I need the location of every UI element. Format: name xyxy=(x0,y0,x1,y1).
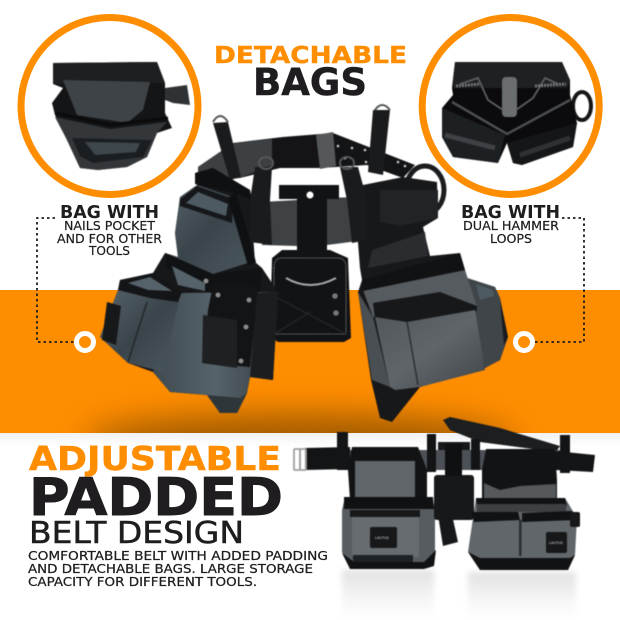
label: left bag: NAILS POCKET xyxy=(64,219,156,233)
title: detachable: DETACHABLE xyxy=(214,41,407,69)
d rings xyxy=(213,105,390,169)
circle: right bag detail xyxy=(422,18,599,194)
center hanger xyxy=(262,185,366,254)
label: right bag: DUAL HAMMER xyxy=(463,219,559,233)
belt xyxy=(294,447,595,472)
left bag xyxy=(342,447,436,569)
center pouch xyxy=(434,442,474,546)
description xyxy=(28,548,328,589)
description: AND DETACHABLE BAGS. LARGE STORAGE xyxy=(28,561,313,576)
hammer loop xyxy=(406,166,444,214)
product photo: front view xyxy=(294,417,595,620)
heading: belt design: BELT DESIGN xyxy=(29,516,244,551)
circle: left bag detail xyxy=(21,18,198,194)
belt straps xyxy=(213,110,390,245)
label: left bag: AND FOR OTHER xyxy=(57,232,162,246)
title: bags: BAGS xyxy=(253,61,367,104)
upper pouch xyxy=(165,185,248,274)
dotted connector right xyxy=(535,218,584,342)
heading: padded: PADDED xyxy=(29,468,283,528)
marker left xyxy=(76,334,94,350)
label: right bag: BAG WITH xyxy=(461,203,560,223)
label: right bag xyxy=(461,203,560,246)
label: left bag: BAG WITH xyxy=(60,203,159,223)
curled belt tail xyxy=(443,417,560,452)
marker right xyxy=(516,334,532,350)
logo: LAUTUS xyxy=(375,536,390,540)
belt band xyxy=(198,132,415,180)
label: left bag: TOOLS xyxy=(88,244,130,258)
right bag assembly xyxy=(357,177,508,422)
orange band xyxy=(0,290,620,438)
dotted connector left xyxy=(37,218,75,342)
heading: adjustable: ADJUSTABLE xyxy=(29,439,281,478)
description: CAPACITY FOR DIFFERENT TOOLS. xyxy=(28,574,257,589)
logo: LAUTUS xyxy=(549,541,564,545)
description: COMFORTABLE BELT WITH ADDED PADDING xyxy=(28,548,328,563)
main pouch xyxy=(153,292,278,413)
center pouch xyxy=(270,250,351,342)
label: right bag: LOOPS xyxy=(490,232,532,246)
label: left bag xyxy=(57,203,162,258)
straps xyxy=(337,432,570,473)
reflection xyxy=(342,570,576,620)
side pocket xyxy=(100,290,180,372)
left bag assembly xyxy=(100,168,278,413)
main tool belt photo xyxy=(100,105,508,422)
right bag xyxy=(468,449,580,570)
